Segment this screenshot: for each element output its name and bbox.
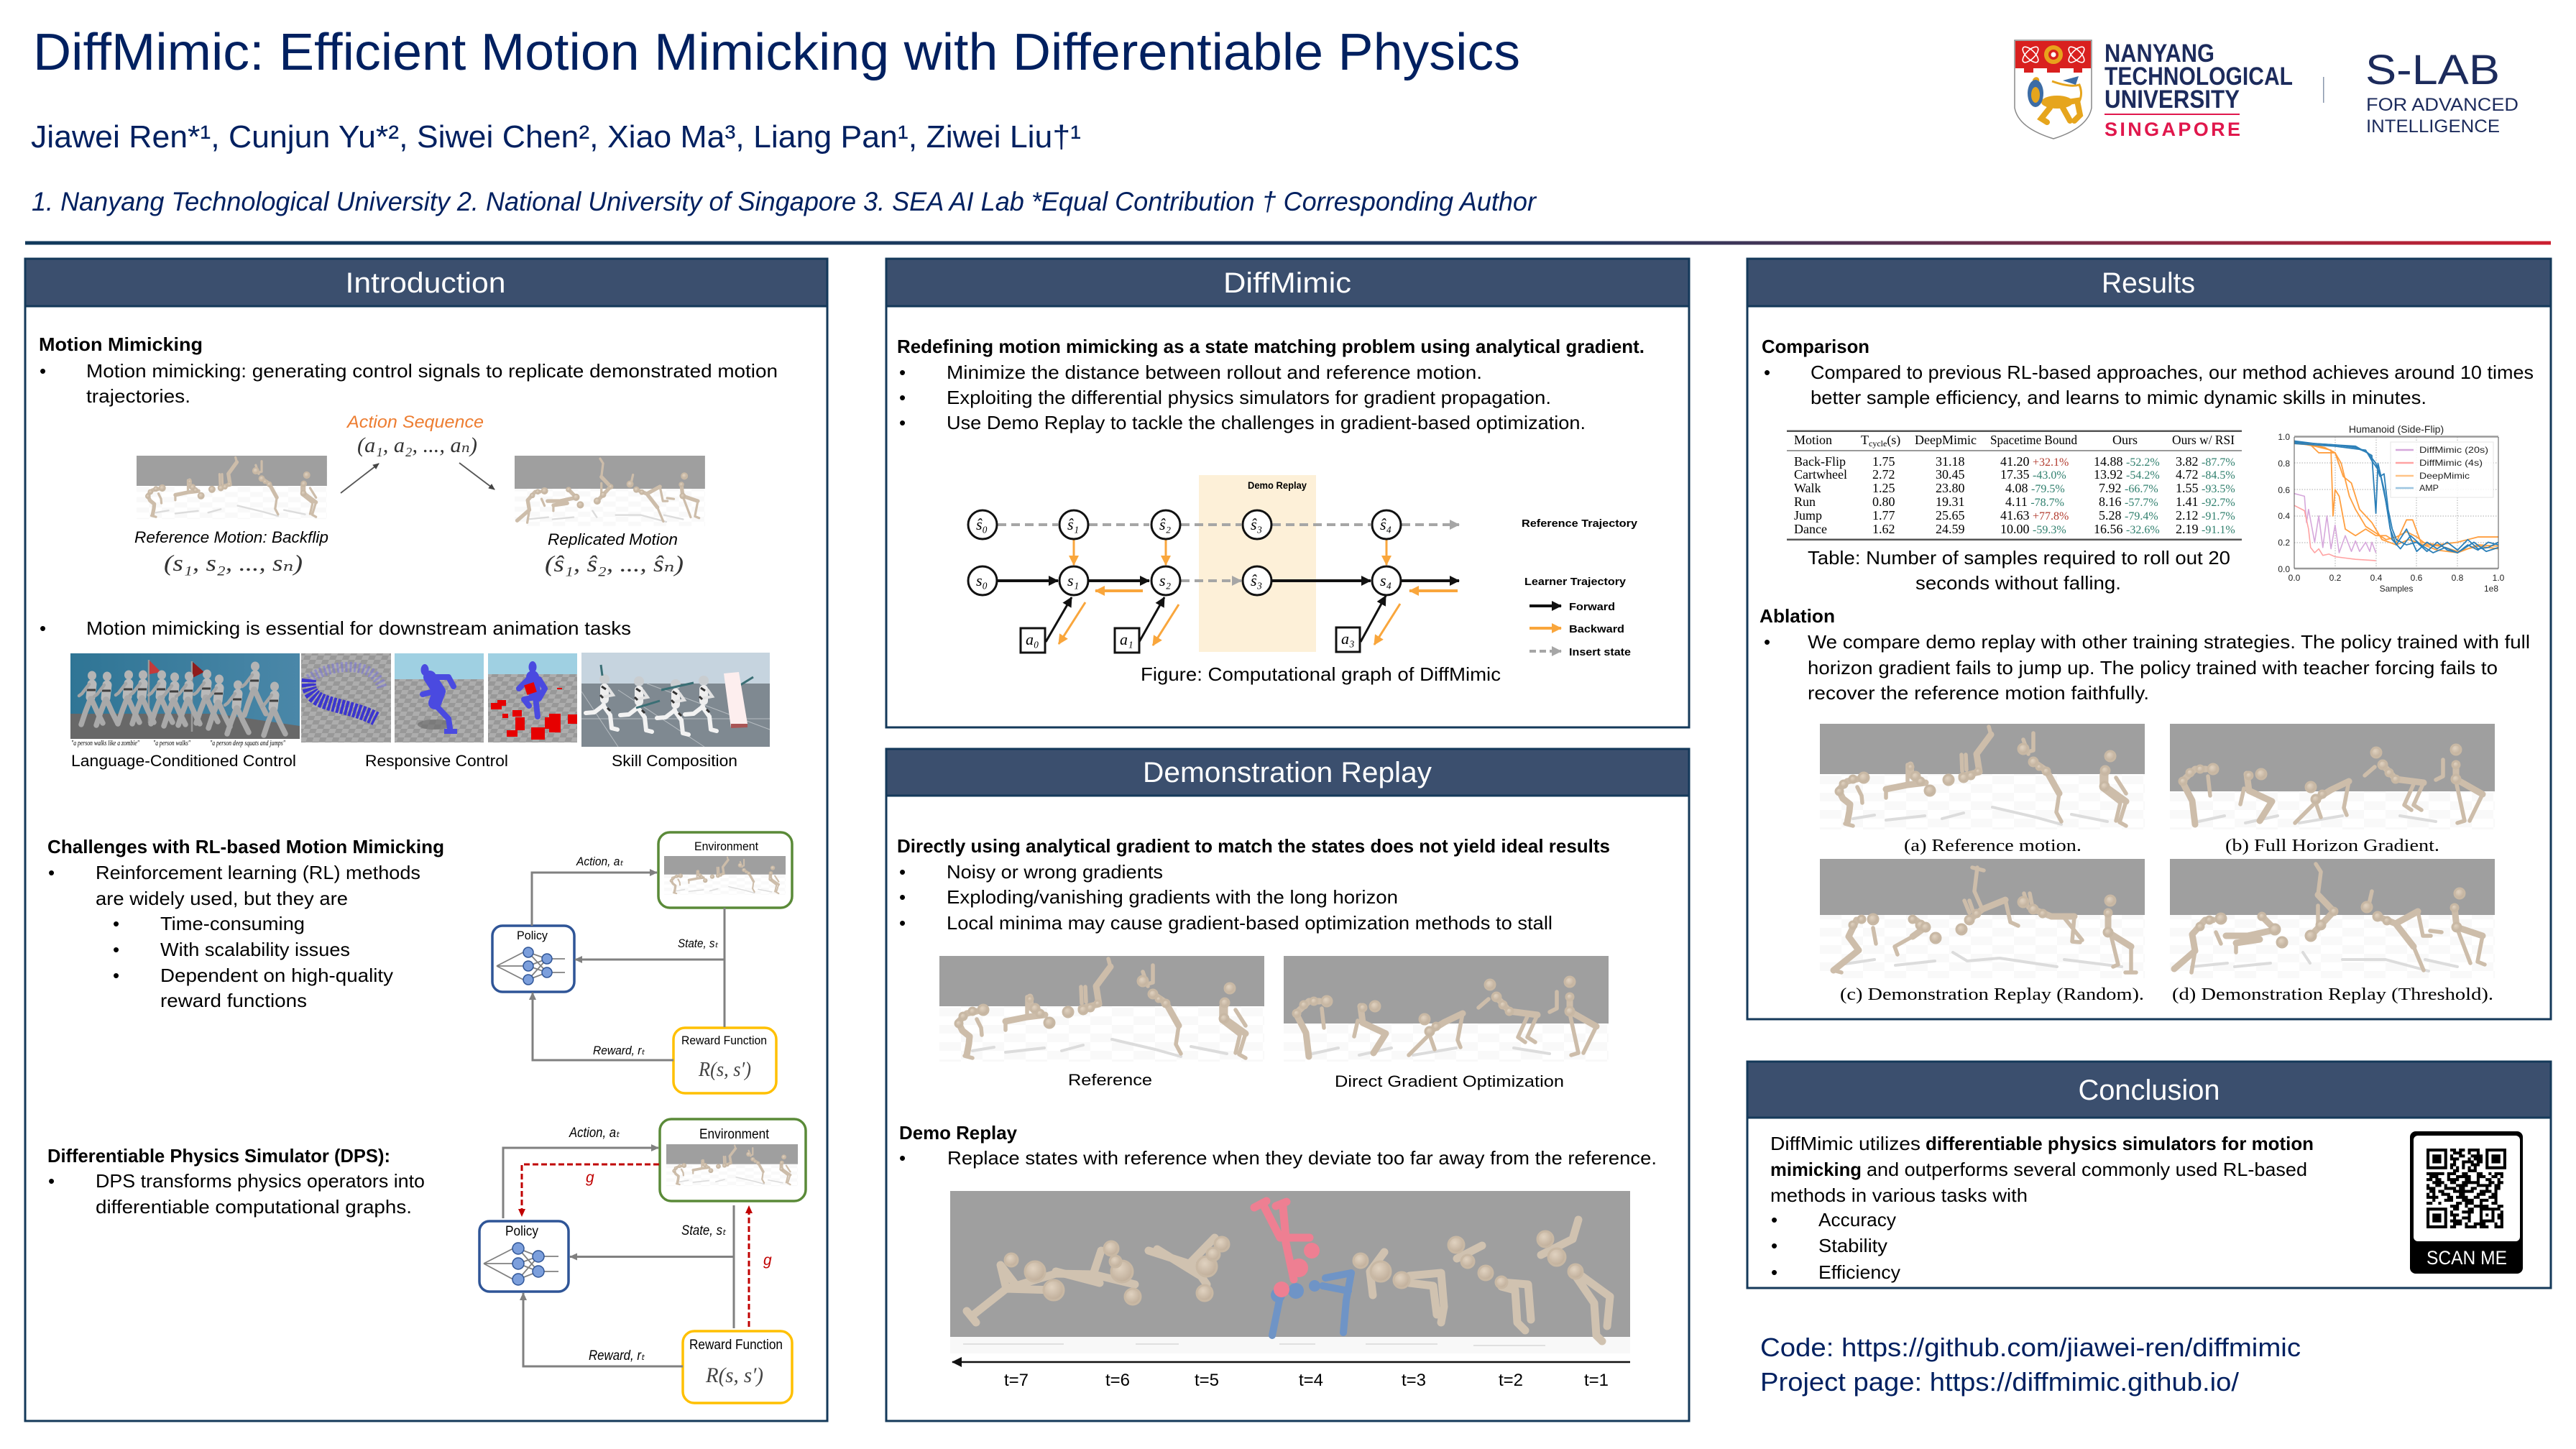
text: challenges: • [48, 862, 55, 883]
table: samples required: 2.12 -91.7% [2176, 508, 2235, 523]
heading: Conclusion [1747, 1062, 2551, 1118]
logo: NTU Singapore: TECHNOLOGICAL [2104, 63, 2293, 91]
box: reward function: R(s, s′) [698, 1059, 751, 1081]
node labels: learner row: s₂ [1159, 571, 1172, 589]
arrow: reward [523, 1293, 683, 1366]
table: samples required: Run [1794, 494, 1816, 509]
table: samples required: 2.19 -91.1% [2176, 522, 2235, 536]
text: gradient problems: Directly using analytical gradient to match the states does not yield ideal results [897, 835, 1610, 857]
box: environment [658, 832, 792, 908]
highlight: demo replay: Demo Replay [1248, 480, 1307, 491]
text: DPS: Differentiable Physics Simulator (DPS): [47, 1145, 390, 1167]
text: conclusion: mimicking [1770, 1159, 1862, 1180]
text: ablation: Ablation [1760, 605, 1835, 627]
table: samples required: 30.45 [1936, 467, 1965, 482]
panel: conclusion [1747, 1062, 2551, 1288]
figure: t=4 replayed pair [1254, 1201, 1351, 1335]
image: (b) full horizon gradient [2170, 724, 2495, 829]
text: conclusion: Accuracy [1818, 1209, 1896, 1230]
arrow: gradient to environment [748, 1206, 750, 1327]
text: DPS: • [48, 1170, 55, 1192]
table: samples required: Jump [1794, 508, 1822, 523]
table: samples required: 8.16 -57.7% [2099, 494, 2158, 509]
image: reference motion [939, 956, 1264, 1062]
text: gradient problems: • [899, 912, 906, 934]
box: environment: Environment [694, 840, 758, 853]
axis tick labels: 1.0 [2493, 573, 2505, 583]
legend: DiffMimic (4s) [2419, 458, 2483, 468]
text: challenges: Challenges with RL-based Motion Mimicking [47, 836, 444, 857]
image: (d) demonstration replay threshold [2170, 859, 2495, 978]
table: samples required: 4.72 -84.5% [2176, 467, 2235, 482]
arrows: learner forward [998, 581, 1459, 642]
action nodes: a₀ [1026, 630, 1039, 648]
table: samples required: cycle [1869, 438, 1887, 448]
table: samples required: 24.59 [1936, 522, 1965, 536]
table: samples required: 1.25 [1872, 481, 1895, 495]
table: samples required: 4.08 -79.5% [2005, 481, 2065, 495]
table: samples required: 0.80 [1872, 494, 1895, 509]
logo: NTU Singapore: NANYANG [2104, 40, 2214, 68]
image: skill composition [581, 653, 770, 747]
label: reward: Reward, rₜ [589, 1348, 645, 1363]
text: comparison: • [1764, 362, 1770, 383]
figure: t=2 [1448, 1237, 1531, 1330]
arrows: backward [1059, 540, 1458, 645]
image: responsive control runner [395, 653, 484, 742]
node labels: learner row: s₁ [1067, 571, 1079, 589]
node labels: reference row [976, 515, 1392, 533]
text: conclusion [1770, 1133, 2314, 1283]
labels: time steps: t=6 [1105, 1371, 1130, 1390]
node labels: reference row: ŝ₃ [1251, 515, 1262, 533]
panel: DiffMimic [886, 259, 1689, 727]
table: samples required: 7.92 -66.7% [2099, 481, 2158, 495]
arrow: inserted state [1181, 579, 1241, 582]
axis tick labels: 0.4 [2370, 573, 2383, 583]
text: ablation: • [1764, 631, 1770, 653]
axis tick labels: 1e8 [2484, 584, 2498, 594]
legend: Forward [1569, 601, 1615, 613]
label: action: Action, aₜ [576, 855, 624, 868]
axis tick labels [2278, 432, 2505, 594]
text: comparison [1762, 336, 2534, 408]
links: code and project page [1760, 1333, 2301, 1397]
text: challenges: • [113, 965, 119, 986]
table: samples required: 25.65 [1936, 508, 1965, 523]
formula: estimated states: (ŝ₁, ŝ₂, ..., ŝₙ) [545, 551, 684, 576]
heading: Introduction: Introduction [345, 267, 506, 299]
image: (c) demonstration replay random [1820, 859, 2145, 978]
table: samples required: Ours [2112, 433, 2138, 447]
text: state matching summary: • [899, 387, 906, 408]
text: conclusion: • [1771, 1209, 1777, 1230]
caption: (b): (b) Full Horizon Gradient. [2225, 837, 2439, 855]
action nodes: a₃ [1341, 630, 1355, 648]
chart: Humanoid side-flip learning curves [2278, 423, 2505, 594]
arrow: action [503, 1148, 658, 1218]
icon: NTU crest [2015, 40, 2092, 139]
labels: time steps: t=1 [1584, 1371, 1609, 1390]
table: samples required: 17.35 -43.0% [2000, 467, 2066, 482]
text: downstream tasks: Motion mimicking is essential for downstream animation tasks [86, 617, 631, 639]
image: direct gradient optimization [1284, 956, 1609, 1062]
caption: (a): (a) Reference motion. [1904, 837, 2082, 855]
table: samples required: Motion [1794, 433, 1832, 447]
text: state matching summary [897, 336, 1644, 433]
box: reward function [683, 1331, 792, 1403]
legend [2391, 442, 2493, 497]
text: challenges: Time-consuming [160, 913, 305, 934]
text: ablation [1760, 605, 2530, 704]
highlight: demo replay [1199, 475, 1316, 652]
label: action sequence: Action Sequence [346, 413, 484, 432]
logo: S-LAB [2365, 47, 2518, 137]
text: downstream tasks: • [40, 617, 46, 639]
node labels: reference row: ŝ₁ [1067, 515, 1079, 533]
figure: t=6 [1149, 1237, 1229, 1301]
nodes: learner row [968, 566, 1401, 595]
text: challenges: are widely used, but they are [96, 888, 348, 909]
table: samples required: Dance [1794, 522, 1827, 536]
caption: reference: Reference [1068, 1071, 1152, 1089]
table: samples required: Back-Flip [1794, 454, 1846, 469]
text: gradient problems [897, 835, 1610, 934]
action nodes [1021, 627, 1360, 653]
table: samples required: 41.20 +32.1% [2000, 454, 2069, 469]
image: demo replay motion sequence [950, 1191, 1630, 1353]
axis tick labels: 0.0 [2288, 573, 2301, 583]
text: demo replay: Replace states with reference when they deviate too far away from the reference. [947, 1147, 1657, 1169]
text: comparison: Compared to previous RL-based approaches, our method achieves around 10 times [1811, 362, 2534, 383]
heading: DiffMimic [886, 259, 1689, 306]
labels: time steps: t=2 [1499, 1371, 1523, 1390]
arrow: reward [533, 993, 673, 1060]
label: reward: Reward, rₜ [593, 1044, 645, 1057]
diagram: RL loop [492, 832, 792, 1093]
text: challenges: With scalability issues [160, 939, 350, 960]
arrow: state [575, 908, 724, 1027]
image: reference motion [137, 456, 327, 519]
text: motion mimicking: • [40, 360, 46, 382]
logo: NTU Singapore [2015, 40, 2293, 140]
diagram: DPS loop [479, 1119, 806, 1403]
text: challenges: • [113, 939, 119, 960]
figure: t=1 [1537, 1220, 1610, 1341]
arrow: gradient to policy [522, 1164, 659, 1216]
axis tick labels: 0.6 [2411, 573, 2423, 583]
table: samples required: 1.62 [1872, 522, 1895, 536]
text: state matching summary: Use Demo Replay to tackle the challenges in gradient-based optimization. [947, 412, 1586, 433]
legend: AMP [2419, 483, 2439, 493]
text: motion mimicking: Motion Mimicking [39, 334, 203, 355]
label: gradient g: g [763, 1252, 772, 1269]
label: state: State, sₜ [678, 937, 719, 950]
heading: Conclusion: Conclusion [2079, 1075, 2220, 1106]
text: state matching summary: Minimize the distance between rollout and reference motion. [947, 362, 1482, 383]
logo: S-LAB: S-LAB [2365, 47, 2500, 93]
text: comparison: better sample efficiency, and learns to mimic dynamic skills in minutes. [1811, 387, 2426, 408]
axis tick labels: 0.2 [2329, 573, 2342, 583]
node labels: learner row: s₄ [1380, 571, 1392, 589]
figure: t=3 [1353, 1252, 1444, 1322]
table: samples required: 1.41 -92.7% [2176, 494, 2235, 509]
table: samples required: 19.31 [1936, 494, 1965, 509]
table: samples required: 1.77 [1872, 508, 1895, 523]
table: samples required: Spacetime Bound [1990, 433, 2077, 447]
box: reward function: Reward Function [689, 1338, 783, 1353]
QR code [2410, 1131, 2523, 1274]
caption: (c): (c) Demonstration Replay (Random). [1840, 985, 2144, 1004]
arrow: state [570, 1205, 734, 1328]
action nodes: a₁ [1120, 630, 1133, 648]
caption: table: Table: Number of samples required to roll out 20 [1808, 547, 2230, 569]
authors: Jiawei Ren*¹, Cunjun Yu*², Siwei Chen², Xiao Ma³, Liang Pan¹, Ziwei Liu†¹ [31, 119, 1081, 155]
figure: t=7 [967, 1241, 1141, 1322]
panel: introduction [25, 259, 827, 1421]
box: reward function [673, 1028, 776, 1093]
table: samples required: 31.18 [1936, 454, 1965, 469]
table: samples required: 23.80 [1936, 481, 1965, 495]
chart title: Humanoid (Side-Flip) [2349, 423, 2444, 435]
box: policy: Policy [505, 1224, 538, 1239]
table: samples required: 14.88 -52.2% [2094, 454, 2160, 469]
text: motion mimicking: Motion mimicking: generating control signals to replicate demonstrated motion [86, 360, 778, 382]
image: language-conditioned control: "a person walks like a zombie" [71, 740, 140, 748]
heading: Results [1747, 259, 2551, 306]
table: samples required: 3.82 -87.7% [2176, 454, 2235, 469]
table: samples required: 10.00 -59.3% [2000, 522, 2066, 536]
legend: Insert state [1569, 646, 1631, 658]
text: gradient problems: Exploding/vanishing gradients with the long horizon [947, 886, 1398, 908]
diagram: computational graph [968, 475, 1638, 658]
node labels: learner row [976, 571, 1392, 589]
text: conclusion: DiffMimic utilizes [1770, 1133, 1920, 1154]
text: conclusion: • [1771, 1235, 1777, 1256]
table: samples required: 1.55 -93.5% [2176, 481, 2235, 495]
formula: actions: (a₁, a₂, ..., aₙ) [357, 433, 477, 457]
label: state: State, sₜ [681, 1223, 726, 1238]
legend: DiffMimic (20s) [2419, 445, 2488, 455]
labels: time steps [1004, 1371, 1609, 1390]
nodes: reference row [968, 510, 1401, 539]
text: conclusion: differentiable physics simulators for motion [1926, 1133, 2314, 1154]
text: motion mimicking [39, 334, 778, 407]
image: (a) reference motion [1820, 724, 2145, 829]
axis tick labels: Samples [2380, 584, 2413, 594]
text: state matching summary: Exploiting the differential physics simulators for gradient propagation. [947, 387, 1551, 408]
legend: Learner Trajectory [1524, 576, 1627, 588]
caption: replicated motion: Replicated Motion [548, 530, 678, 548]
table: samples required: 2.72 [1872, 467, 1895, 482]
text: DPS [47, 1145, 425, 1218]
text: demo replay: • [899, 1147, 906, 1169]
axis tick labels: 0.6 [2278, 485, 2290, 495]
label: action: Action, aₜ [569, 1126, 620, 1141]
caption: table [1808, 547, 2230, 594]
text: conclusion: methods in various tasks with [1770, 1184, 2028, 1206]
image: responsive control crowd [301, 653, 391, 742]
table: samples required: 1.75 [1872, 454, 1895, 469]
table: samples required: DeepMimic [1915, 433, 1977, 447]
legend [1522, 518, 1638, 658]
axis tick labels: 0.2 [2278, 538, 2290, 548]
text: motion mimicking: trajectories. [86, 385, 190, 407]
box: reward function: R(s, s′) [705, 1363, 763, 1387]
legend: Backward [1569, 623, 1624, 635]
axis tick labels: 0.0 [2278, 564, 2290, 574]
image: replicated motion [515, 456, 705, 526]
affiliations: 1. Nanyang Technological University 2. National University of Singapore 3. SEA AI Lab *Equal Contribution † Corresponding Author [32, 187, 1537, 216]
box: environment [660, 1119, 806, 1201]
text: challenges: Reinforcement learning (RL) methods [96, 862, 420, 883]
caption: table: seconds without falling. [1915, 572, 2121, 594]
caption: reference motion: Reference Motion: Backflip [134, 528, 328, 546]
heading: Demonstration Replay: Demonstration Replay [1143, 757, 1432, 788]
text: challenges [47, 836, 444, 1011]
image: language-conditioned control [70, 653, 300, 748]
formula: states: (s₁, s₂, ..., sₙ) [164, 550, 303, 576]
text: challenges: • [113, 913, 119, 934]
table: samples required: (s) [1887, 433, 1900, 448]
logo: S-LAB: INTELLIGENCE [2366, 116, 2500, 137]
table: samples required: Cartwheel [1794, 467, 1847, 482]
node labels: reference row: ŝ₂ [1159, 515, 1172, 533]
axis tick labels: 0.4 [2278, 511, 2290, 521]
caption: direct gradient optimization: Direct Gradient Optimization [1335, 1072, 1564, 1090]
text: ablation: recover the reference motion faithfully. [1808, 682, 2149, 704]
text: gradient problems: Noisy or wrong gradients [947, 861, 1163, 883]
box: policy [479, 1221, 569, 1292]
box: policy [492, 926, 574, 992]
arrow: time axis [952, 1361, 1630, 1363]
image: language-conditioned control: "a person walks" [153, 740, 191, 748]
table: samples required [1787, 430, 2242, 540]
heading: Introduction [25, 259, 827, 306]
links: code and project page: Code: https://github.com/jiawei-ren/diffmimic [1760, 1333, 2301, 1362]
text: comparison: Comparison [1762, 336, 1869, 357]
text: state matching summary: • [899, 412, 906, 433]
table: samples required: Ours w/ RSI [2172, 433, 2235, 447]
box: reward function: Reward Function [681, 1034, 767, 1047]
axis tick labels: 0.8 [2278, 459, 2290, 469]
panel: results [1747, 259, 2551, 1019]
text: state matching summary: Redefining motion mimicking as a state matching problem using analytical gradient. [897, 336, 1644, 357]
arrow: action [532, 873, 657, 926]
panel: demonstration replay [886, 749, 1689, 1421]
captions: control examples [71, 752, 737, 770]
node labels: learner row: ŝ₃ [1251, 571, 1262, 589]
arrow: to action [341, 464, 379, 493]
labels: time steps: t=4 [1299, 1371, 1323, 1390]
links: code and project page: Project page: https://diffmimic.github.io/ [1760, 1367, 2239, 1397]
heading: DiffMimic: DiffMimic [1223, 267, 1351, 299]
text: conclusion: Efficiency [1818, 1261, 1900, 1283]
box: policy: Policy [517, 929, 548, 942]
table: samples required: T [1861, 433, 1869, 447]
text: conclusion: Stability [1818, 1235, 1887, 1256]
labels: time steps: t=7 [1004, 1371, 1029, 1390]
text: challenges: reward functions [160, 990, 307, 1011]
captions: control examples: Responsive Control [365, 752, 508, 770]
legend: Reference Trajectory [1522, 518, 1638, 530]
text: demo replay [899, 1122, 1657, 1169]
table: samples required: 41.63 +77.8% [2000, 508, 2069, 523]
captions: control examples: Skill Composition [612, 752, 737, 770]
table: samples required: 16.56 -32.6% [2094, 522, 2160, 536]
caption: (d): (d) Demonstration Replay (Threshold). [2172, 985, 2493, 1004]
logo: NTU Singapore: SINGAPORE [2104, 119, 2240, 140]
image: responsive control with obstacles [488, 653, 577, 742]
text: gradient problems: • [899, 861, 906, 883]
table: samples required: 4.11 -78.7% [2005, 494, 2064, 509]
node labels: learner row: s₀ [976, 571, 988, 589]
box: environment: Environment [699, 1127, 770, 1142]
table: samples required: 5.28 -79.4% [2099, 508, 2158, 523]
node labels: reference row: ŝ₀ [976, 515, 988, 533]
legend: DeepMimic [2419, 471, 2470, 481]
captions: control examples: Language-Conditioned Control [71, 752, 296, 770]
title: DiffMimic: Efficient Motion Mimicking with Differentiable Physics [33, 24, 1520, 81]
text: gradient problems: Local minima may cause gradient-based optimization methods to stall [947, 912, 1552, 934]
table: samples required: 13.92 -54.2% [2094, 467, 2160, 482]
QR code: SCAN ME [2426, 1247, 2507, 1269]
arrows: reference trajectory [998, 523, 1459, 526]
text: gradient problems: • [899, 886, 906, 908]
axis tick labels: 0.8 [2452, 573, 2464, 583]
caption: computational graph: Figure: Computational graph of DiffMimic [1141, 663, 1501, 685]
axis tick labels: 1.0 [2278, 432, 2290, 442]
text: DPS: DPS transforms physics operators into [96, 1170, 425, 1192]
heading: Results: Results [2102, 267, 2195, 299]
table: samples required: Walk [1794, 481, 1821, 495]
label: gradient g: g [586, 1169, 594, 1186]
text: conclusion: and outperforms several commonly used RL-based [1867, 1159, 2307, 1180]
image: language-conditioned control: "a person deep squats and jumps" [210, 740, 286, 748]
text: demo replay: Demo Replay [899, 1122, 1018, 1144]
text: ablation: We compare demo replay with other training strategies. The policy trained with full [1808, 631, 2530, 653]
logo: NTU Singapore: UNIVERSITY [2104, 86, 2240, 114]
text: state matching summary: • [899, 362, 906, 383]
labels: time steps: t=5 [1195, 1371, 1219, 1390]
node labels: reference row: ŝ₄ [1380, 515, 1392, 533]
logo: S-LAB: FOR ADVANCED [2366, 95, 2518, 115]
arrow: to replicated [459, 463, 494, 489]
text: DPS: differentiable computational graphs. [96, 1196, 412, 1218]
heading: Demonstration Replay [886, 749, 1689, 796]
text: conclusion: • [1771, 1261, 1777, 1283]
text: ablation: horizon gradient fails to jump up. The policy trained with teacher forcing fails to [1808, 657, 2498, 678]
figure: motion mimicking pipeline [134, 413, 705, 576]
labels: time steps: t=3 [1402, 1371, 1426, 1390]
text: challenges: Dependent on high-quality [160, 965, 393, 986]
